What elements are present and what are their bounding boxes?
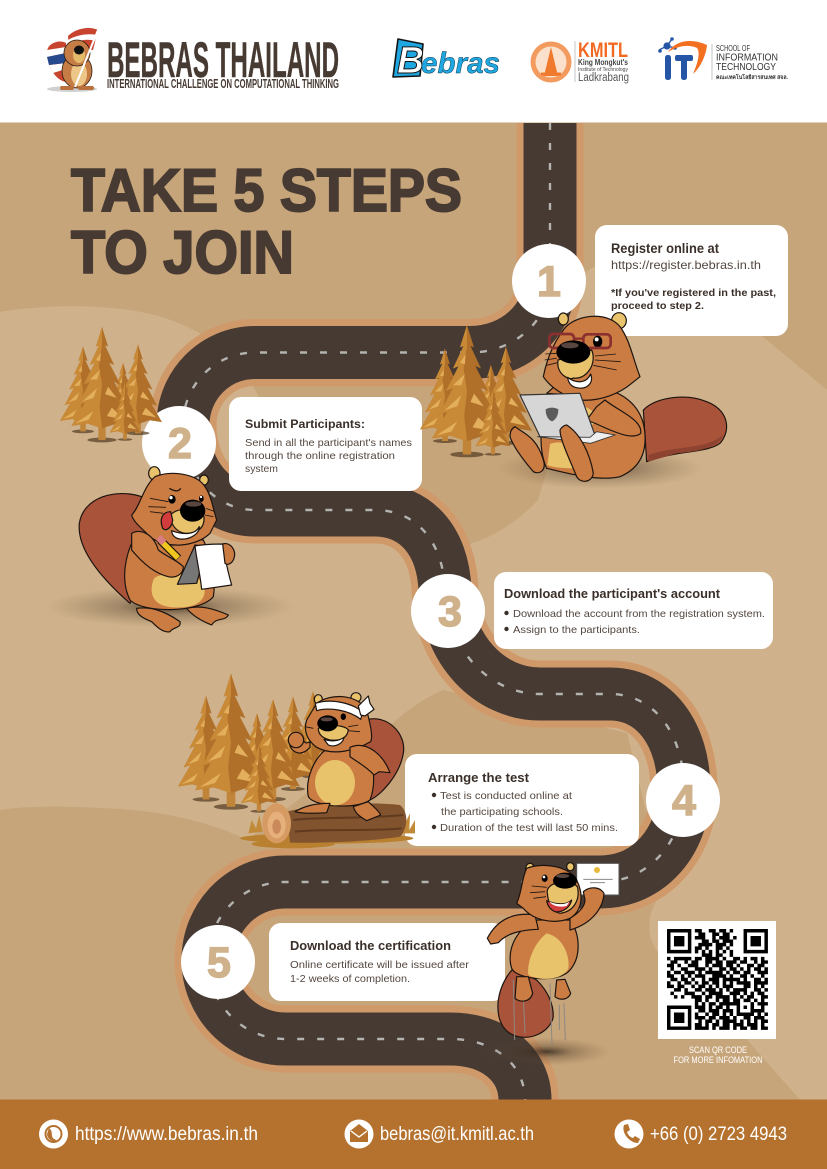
step 1 card: proceed to step 2. [611, 300, 704, 312]
step 4 card: Arrange the test [428, 771, 530, 785]
step number circles [142, 244, 720, 999]
step 5 card: 1-2 weeks of completion. [290, 973, 410, 985]
title: TO JOIN [71, 219, 294, 286]
logo: Bebras Thailand [47, 28, 339, 92]
logo: KMITL: Ladkrabang [578, 72, 629, 84]
logo: School of Information Technology: คณะเทคโนโลยีสารสนเทศ สจล. [716, 73, 788, 81]
logo: School of Information Technology: SCHOOL OF [716, 44, 750, 53]
step 3 card: Download the participant's account [504, 587, 721, 601]
step 5 card: Download the certification [290, 939, 451, 953]
logo: Bebras: B [397, 40, 424, 82]
footer: email: bebras@it.kmitl.ac.th [380, 1124, 534, 1145]
step number circles: 3 [438, 588, 462, 636]
logo: KMITL: Institute of Technology [578, 67, 628, 73]
logo: School of Information Technology: TECHNOLOGY [716, 62, 776, 73]
trees: left cluster [60, 327, 162, 442]
step number circles: 1 [537, 258, 561, 306]
step 1 card: *If you've registered in the past, [611, 287, 776, 299]
beaver on log with headband [240, 693, 415, 848]
footer: phone [614, 1120, 787, 1148]
beaver jumping with certificate [483, 863, 619, 1066]
footer: website: https://www.bebras.in.th [75, 1124, 258, 1145]
footer: phone: +66 (0) 2723 4943 [650, 1124, 787, 1145]
step 2 card: Send in all the participant's names [245, 437, 412, 449]
step 4 card: Duration of the test will last 50 mins. [440, 822, 618, 834]
beaver with notepad [45, 467, 295, 632]
footer: email [344, 1120, 534, 1148]
header band: BEBRAS THAILAND [107, 32, 339, 88]
step 2 card: system [245, 463, 278, 475]
logo: School of Information Technology [658, 37, 788, 81]
step 2 card: Submit Participants: [245, 417, 365, 431]
trees: right cluster [420, 325, 532, 457]
footer band [0, 1100, 827, 1169]
step number circles: 2 [168, 420, 192, 468]
step 1 card: Register online at [611, 241, 719, 256]
title: TAKE 5 STEPS [71, 157, 462, 224]
logo: School of Information Technology: INFORMATION [716, 52, 778, 64]
step 4 card [405, 754, 639, 846]
title [71, 157, 462, 286]
step 4 card: Test is conducted online at [440, 790, 572, 802]
beaver with laptop [497, 313, 727, 489]
step 1 card [595, 225, 788, 336]
step 3 card [494, 572, 773, 649]
logo: Bebras: ebras [421, 47, 500, 80]
step number circles: 5 [207, 939, 231, 987]
step number circles: 4 [672, 777, 696, 825]
step 5 card [269, 923, 505, 1001]
footer: website [39, 1120, 258, 1148]
logo: Bebras Thailand: INTERNATIONAL CHALLENGE ON COMPUTATIONAL THINKING [107, 76, 339, 91]
step 4 card: the participating schools. [441, 806, 563, 818]
logo: KMITL: King Mongkut's [578, 58, 628, 67]
step 5 card: Online certificate will be issued after [290, 959, 470, 971]
header band [0, 0, 827, 122]
step 3 card: Download the account from the registration system. [513, 608, 765, 620]
step 2 card: through the online registration [245, 450, 395, 462]
step 1 card: https://register.bebras.in.th [611, 258, 761, 272]
QR code: SCAN QR CODE [689, 1045, 747, 1055]
step 2 card [229, 397, 422, 491]
logo: KMITL: KMITL [578, 39, 628, 62]
QR code: FOR MORE INFOMATION [674, 1055, 762, 1065]
QR code [658, 921, 776, 1065]
logo: Bebras [393, 39, 500, 82]
logo: KMITL [530, 39, 629, 84]
trees: centre cluster [178, 674, 336, 813]
winding road [183, 123, 684, 1100]
step 3 card: Assign to the participants. [513, 624, 640, 636]
